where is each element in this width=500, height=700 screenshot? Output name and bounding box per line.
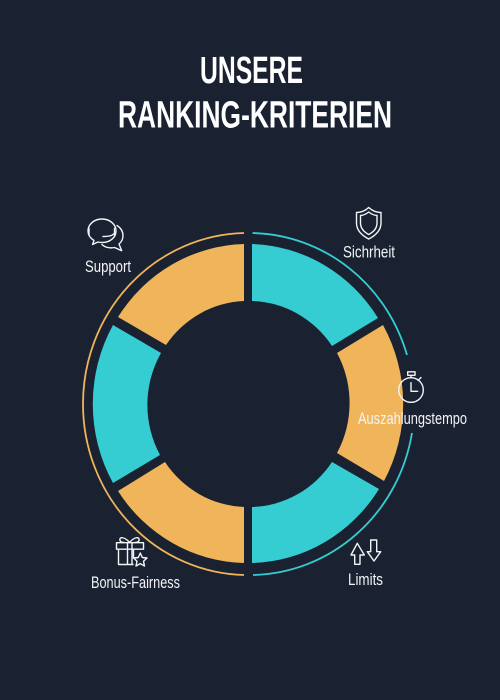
icon: gift with star [116,538,147,566]
label: Auszahlungstempo: Auszahlungstempo [358,409,467,428]
outer arc: cyan lower right [253,433,412,575]
segment: Limits [252,462,379,563]
label: Support: Support [85,257,131,276]
segment: Bonus-Fairness [118,462,244,563]
outer arc: orange left [83,233,244,575]
icon: stopwatch [399,372,423,402]
title: UNSERE [200,50,303,92]
label: Sichrheit: Sichrheit [343,242,395,262]
segment: Auszahlungstempo [337,325,403,481]
outer arc: cyan upper right [252,233,407,355]
title [118,50,392,136]
label: Limits: Limits [348,570,383,589]
label: Bonus-Fairness: Bonus-Fairness [91,573,180,592]
icon: shield [356,208,381,239]
segment: cyan left [93,325,161,483]
icon: support chat headset [88,219,123,251]
donut chart [93,244,403,563]
icon: limits arrows [351,540,381,564]
segment: Sichrheit [252,244,378,346]
segment: Support [118,244,244,345]
